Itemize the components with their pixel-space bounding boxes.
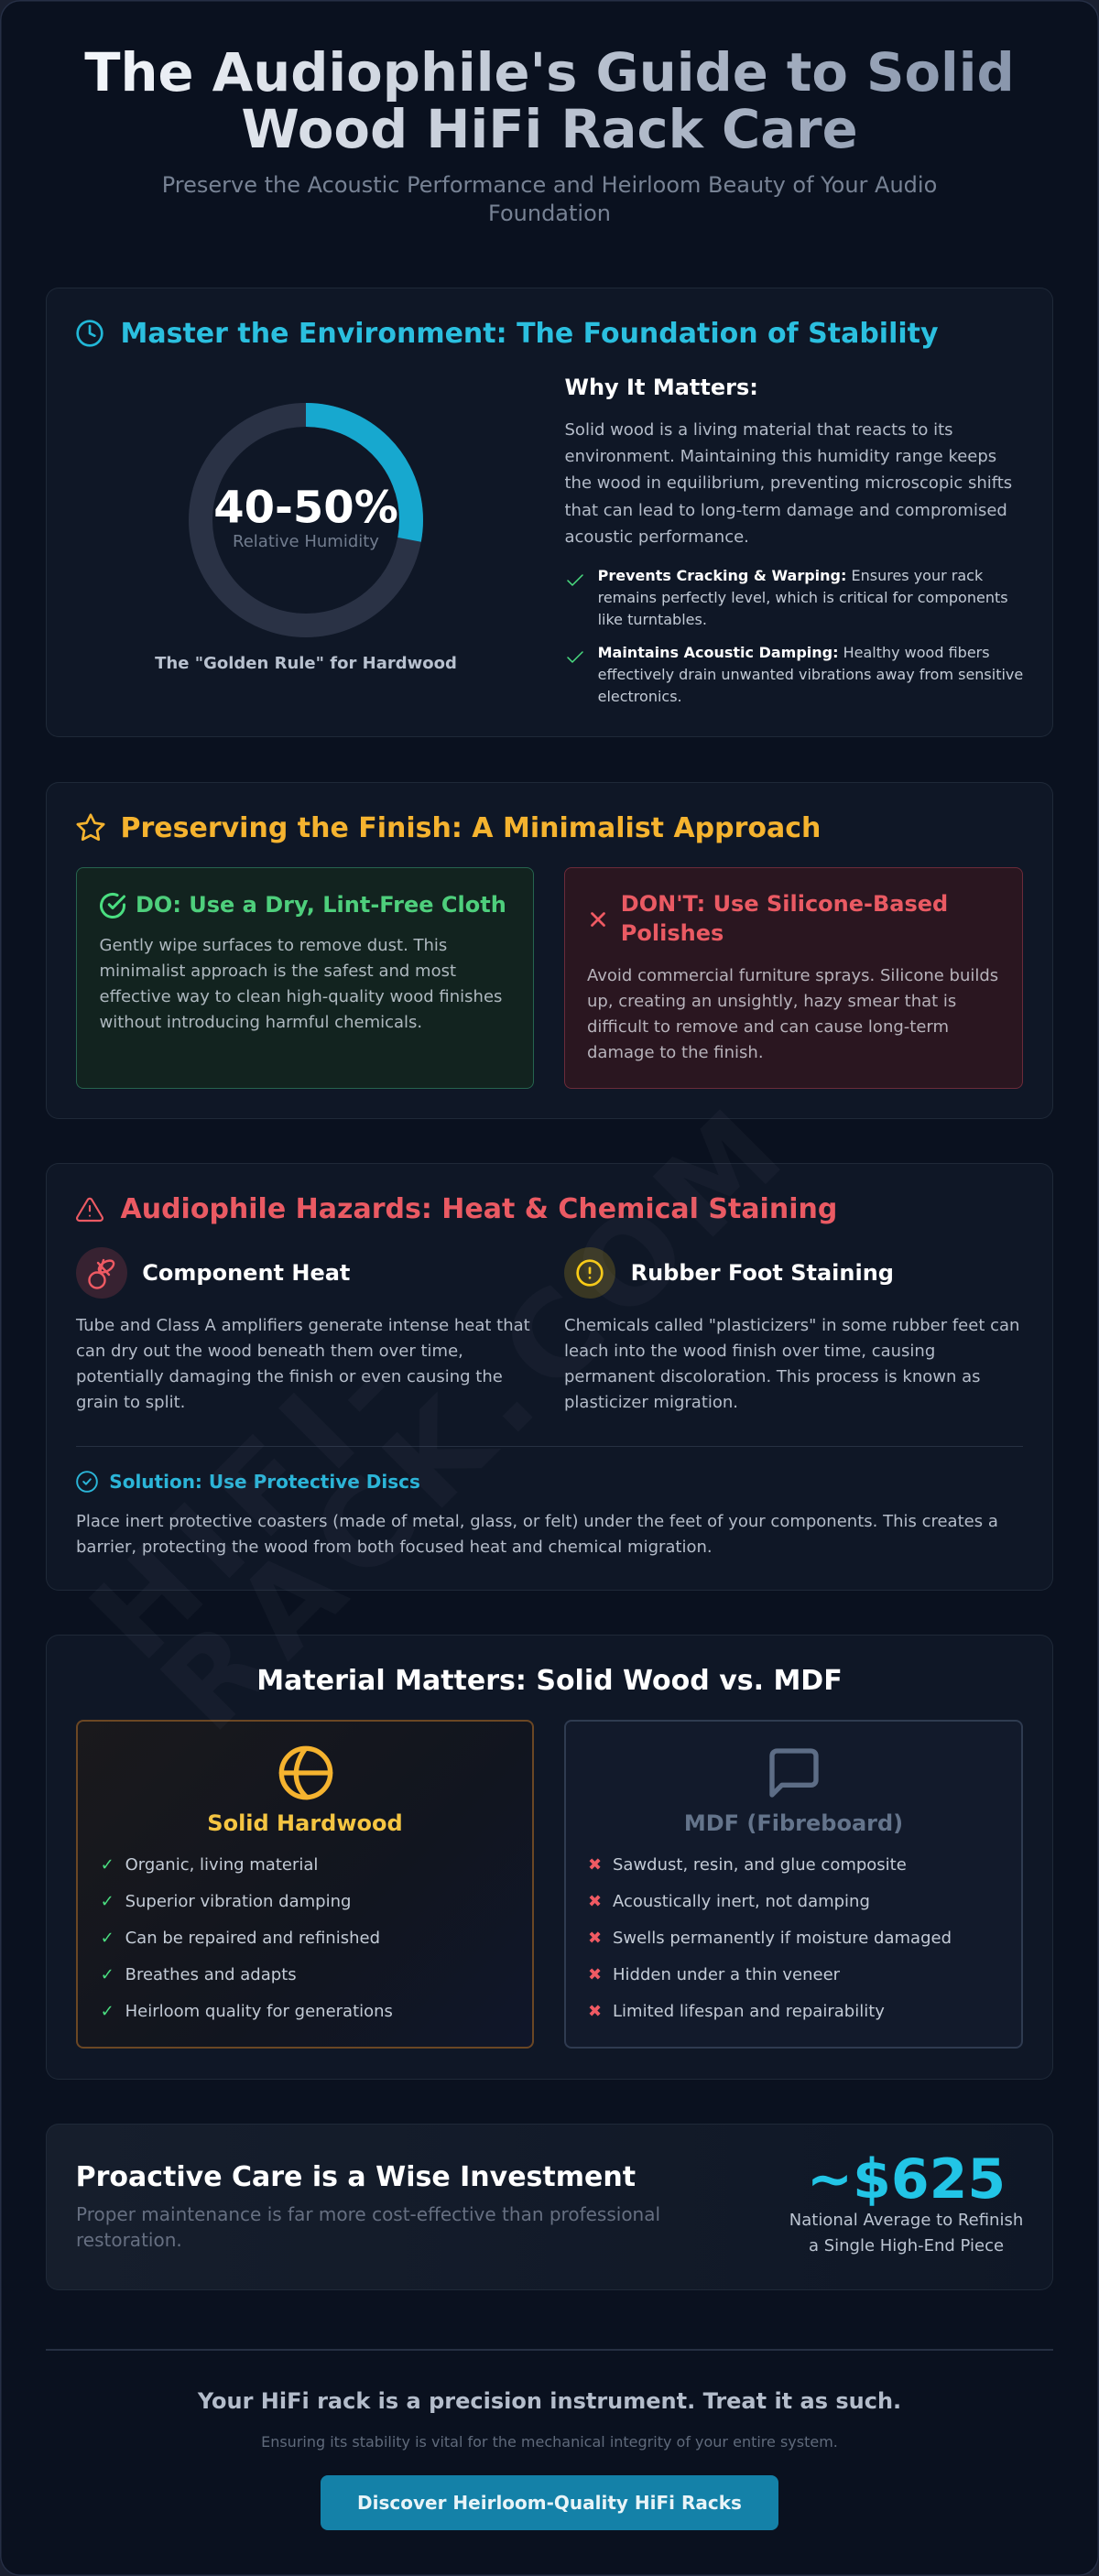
watermark: HIFI- bbox=[65, 1312, 439, 1686]
text: do: effective way to clean high-quality wood finishes bbox=[99, 987, 502, 1006]
panel: investment bbox=[46, 2124, 1053, 2290]
heading: material matters: Material Matters: Solid Wood vs. MDF bbox=[256, 1665, 843, 1696]
text: component heat bbox=[75, 1316, 530, 1412]
title bbox=[0, 45, 1099, 158]
benefit: prevents cracking: remains perfectly level, which is critical for components bbox=[598, 589, 1008, 606]
text: dont: difficult to remove and can cause long-term bbox=[587, 1016, 949, 1037]
card: mdf: ✖ bbox=[588, 2002, 602, 2021]
subtitle: Preserve the Acoustic Performance and Heirloom Beauty of Your Audio bbox=[162, 172, 937, 198]
text: why it matters: environment. Maintaining this humidity range keeps bbox=[564, 447, 996, 466]
benefit: prevents cracking: Prevents Cracking & Warping: Ensures your rack bbox=[598, 567, 983, 584]
subtitle: Foundation bbox=[488, 201, 611, 226]
list: mdf drawbacks: Limited lifespan and repairability bbox=[613, 2002, 885, 2021]
footer heading: Your HiFi rack is a precision instrument. Treat it as such. bbox=[198, 2388, 901, 2414]
stat: refinish cost: ~$625 bbox=[807, 2147, 1006, 2212]
icon: globe bbox=[278, 1745, 333, 1800]
chart: humidity donut bbox=[189, 403, 423, 637]
text: component heat: grain to split. bbox=[76, 1393, 185, 1412]
heading: solid hardwood: Solid Hardwood bbox=[207, 1810, 403, 1836]
heading: dont: Polishes bbox=[621, 920, 724, 946]
card: solid hardwood: ✓ bbox=[101, 2002, 114, 2021]
benefit: prevents cracking bbox=[598, 567, 1008, 628]
card: mdf: ✖ bbox=[588, 1929, 602, 1948]
text: do: Gently wipe surfaces to remove dust. This bbox=[99, 936, 447, 955]
title: The Audiophile's Guide to Solid bbox=[84, 42, 1015, 103]
list: solid wood benefits bbox=[101, 1855, 393, 2021]
text: do: minimalist approach is the safest and most bbox=[99, 962, 456, 981]
text: component heat: potentially damaging the finish or even causing the bbox=[76, 1367, 503, 1386]
icon: warning triangle bbox=[76, 1198, 103, 1222]
text: why it matters: acoustic performance. bbox=[564, 527, 749, 547]
card: dont bbox=[564, 867, 1023, 1089]
list: solid wood benefits: Heirloom quality for generations bbox=[125, 2002, 393, 2021]
text: rubber foot bbox=[564, 1316, 1019, 1412]
icon: check bbox=[567, 651, 583, 663]
card: mdf: ✖ bbox=[588, 1965, 602, 1984]
list: mdf drawbacks: Hidden under a thin veneer bbox=[613, 1965, 840, 1984]
button bbox=[321, 2475, 778, 2530]
chart: humidity donut: Relative Humidity bbox=[233, 532, 379, 551]
text: why it matters: Solid wood is a living material that reacts to its bbox=[564, 420, 953, 440]
icon: rubber foot alert bbox=[564, 1247, 615, 1299]
text: dont: damage to the finish. bbox=[587, 1042, 764, 1062]
text: solution: barrier, protecting the wood from both focused heat and chemical migration. bbox=[76, 1537, 713, 1557]
benefit: acoustic damping: electronics. bbox=[598, 688, 682, 705]
heading: investment: Proactive Care is a Wise Investment bbox=[76, 2161, 636, 2192]
list: solid wood benefits: Organic, living material bbox=[125, 1855, 318, 1875]
list: mdf drawbacks: Sawdust, resin, and glue composite bbox=[613, 1855, 907, 1875]
caption: refinish cost: a Single High-End Piece bbox=[809, 2236, 1004, 2255]
list: mdf drawbacks: Swells permanently if moisture damaged bbox=[613, 1929, 952, 1948]
panel: master the environment bbox=[46, 288, 1053, 737]
caption: refinish cost bbox=[789, 2211, 1023, 2255]
text: rubber foot: permanent discoloration. This process is known as bbox=[564, 1367, 980, 1386]
panel: hazards bbox=[46, 1163, 1053, 1591]
text: rubber foot: leach into the wood finish over time, causing bbox=[564, 1342, 935, 1361]
heading: do: DO: Use a Dry, Lint-Free Cloth bbox=[136, 892, 506, 918]
icon: solution check bbox=[76, 1471, 98, 1493]
card: solid hardwood: ✓ bbox=[101, 1855, 114, 1875]
caption: refinish cost: National Average to Refinish bbox=[789, 2211, 1023, 2230]
text: component heat: Tube and Class A amplifiers generate intense heat that bbox=[76, 1316, 530, 1335]
text: why it matters: that can lead to long-term damage and compromised bbox=[564, 501, 1007, 520]
panel: material comparison bbox=[46, 1635, 1053, 2080]
text: component heat: can dry out the wood beneath them over time, bbox=[76, 1342, 463, 1361]
heading: environment: Master the Environment: The Foundation of Stability bbox=[121, 317, 939, 350]
icon: check circle bbox=[99, 892, 125, 918]
text: solution bbox=[76, 1511, 998, 1557]
list: mdf drawbacks: Acoustically inert, not damping bbox=[613, 1892, 870, 1911]
icon: check bbox=[567, 574, 583, 586]
text: dont: Avoid commercial furniture sprays. Silicone builds bbox=[587, 965, 998, 985]
heading: solution: Solution: Use Protective Discs bbox=[109, 1471, 420, 1493]
heading: component heat: Component Heat bbox=[142, 1260, 350, 1286]
icon: x bbox=[591, 912, 605, 927]
heading: dont bbox=[621, 891, 948, 946]
icon: heat bbox=[76, 1247, 127, 1299]
benefit: acoustic damping: Maintains Acoustic Damping: Healthy wood fibers bbox=[598, 644, 990, 661]
card: do bbox=[76, 867, 534, 1089]
footer text: Ensuring its stability is vital for the mechanical integrity of your entire system. bbox=[261, 2433, 838, 2451]
icon: clock bbox=[76, 320, 103, 347]
card: mdf: ✖ bbox=[588, 1855, 602, 1875]
icon: star bbox=[76, 813, 104, 841]
card: mdf bbox=[564, 1720, 1023, 2049]
benefit: acoustic damping: effectively drain unwanted vibrations away from sensitive bbox=[598, 666, 1023, 683]
heading: finish: Preserving the Finish: A Minimalist Approach bbox=[121, 811, 821, 844]
list: solid wood benefits: Can be repaired and refinished bbox=[125, 1929, 380, 1948]
benefit: prevents cracking: like turntables. bbox=[598, 611, 707, 628]
heading: dont: DON'T: Use Silicone-Based bbox=[621, 891, 948, 917]
card: solid hardwood: ✓ bbox=[101, 1929, 114, 1948]
list: solid wood benefits: Superior vibration damping bbox=[125, 1892, 351, 1911]
card: mdf: ✖ bbox=[588, 1892, 602, 1911]
text: investment: Proper maintenance is far more cost-effective than professional bbox=[76, 2203, 660, 2225]
card: solid hardwood bbox=[76, 1720, 534, 2049]
chart: humidity donut: 40-50% bbox=[213, 482, 398, 533]
list: mdf drawbacks bbox=[588, 1855, 952, 2021]
text: rubber foot: plasticizer migration. bbox=[564, 1393, 738, 1412]
text: investment: restoration. bbox=[76, 2229, 182, 2251]
panel: preserving the finish bbox=[46, 782, 1053, 1119]
heading: rubber foot staining: Rubber Foot Staining bbox=[631, 1260, 894, 1286]
heading: why it matters: Why It Matters: bbox=[564, 375, 758, 400]
text: do bbox=[99, 936, 502, 1032]
watermark: RACK.COM bbox=[136, 1074, 819, 1757]
title: Wood HiFi Rack Care bbox=[241, 99, 858, 160]
heading: hazards: Audiophile Hazards: Heat & Chemical Staining bbox=[121, 1192, 837, 1225]
subtitle bbox=[162, 172, 937, 226]
text: why it matters: the wood in equilibrium, preventing microscopic shifts bbox=[564, 473, 1012, 493]
benefit: acoustic damping bbox=[598, 644, 1023, 705]
list: solid wood benefits: Breathes and adapts bbox=[125, 1965, 297, 1984]
button: Discover Heirloom-Quality HiFi Racks bbox=[357, 2492, 742, 2514]
heading: mdf: MDF (Fibreboard) bbox=[684, 1810, 903, 1836]
text: why it matters bbox=[564, 420, 1012, 547]
text: rubber foot: Chemicals called "plasticizers" in some rubber feet can bbox=[564, 1316, 1019, 1335]
card: solid hardwood: ✓ bbox=[101, 1892, 114, 1911]
text: dont bbox=[587, 965, 998, 1062]
caption: golden rule: The "Golden Rule" for Hardwood bbox=[155, 654, 457, 673]
text: do: without introducing harmful chemicals. bbox=[99, 1013, 422, 1032]
text: investment bbox=[76, 2203, 660, 2251]
text: dont: up, creating an unsightly, hazy smear that is bbox=[587, 991, 956, 1011]
card: solid hardwood: ✓ bbox=[101, 1965, 114, 1984]
icon: speech bubble bbox=[769, 1748, 819, 1798]
text: solution: Place inert protective coasters (made of metal, glass, or felt) under the feet of your components. This creates a bbox=[76, 1511, 998, 1531]
